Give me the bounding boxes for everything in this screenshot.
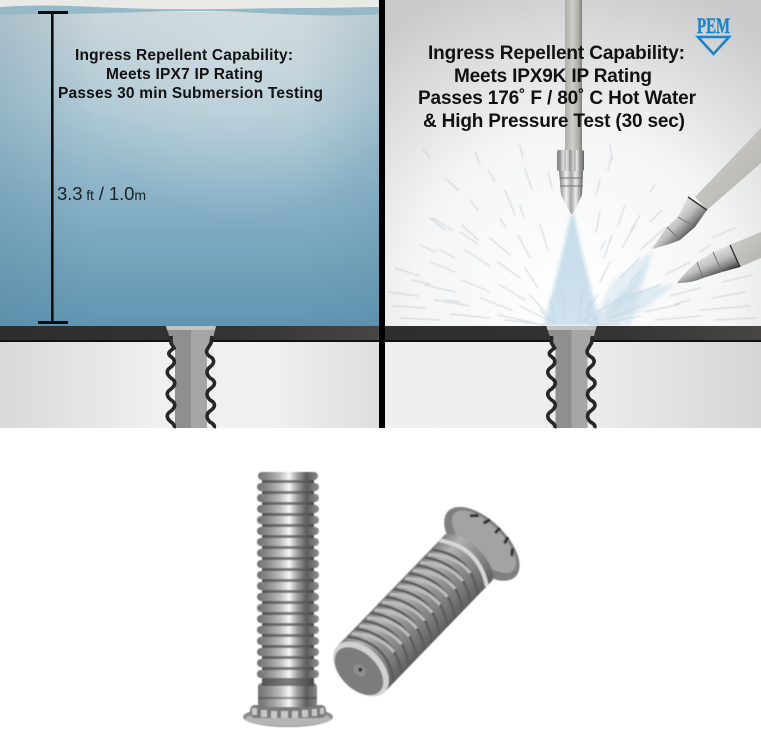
sheet plate — [385, 326, 761, 342]
text block: IPX7 rating: Passes 30 min Submersion Testing — [58, 85, 323, 102]
depth marker — [38, 11, 68, 324]
text block: IPX9K rating: Passes 176˚ F / 80˚ C Hot Water — [418, 88, 697, 109]
centre dimple — [351, 662, 368, 679]
text block: IPX7 rating — [58, 47, 323, 102]
photo: upright fastener — [243, 472, 333, 727]
threaded stud — [546, 326, 596, 428]
spray jets — [544, 214, 677, 326]
text block: IPX9K rating: Ingress Repellent Capability: — [428, 43, 685, 64]
depth label: 3.3 ft / 1.0m — [57, 183, 146, 204]
lower material — [385, 342, 761, 428]
panel: IPX9K hot water — [385, 0, 761, 428]
text block: IPX9K rating: & High Pressure Test (30 sec) — [423, 111, 685, 132]
flange — [243, 707, 333, 727]
shank — [337, 525, 501, 692]
threads — [257, 472, 319, 678]
panel: IPX7 submersion — [0, 0, 379, 428]
text block: IPX7 rating: Meets IPX7 IP Rating — [106, 66, 263, 83]
nozzle: lower angled — [677, 232, 761, 283]
water surface — [0, 5, 379, 15]
air above water — [0, 0, 379, 14]
text block: IPX9K rating: Meets IPX9K IP Rating — [454, 66, 652, 87]
water streaks — [388, 145, 755, 325]
shoulder highlight — [439, 532, 495, 586]
collar — [258, 683, 317, 707]
threaded stud — [166, 326, 216, 428]
thread core — [262, 474, 314, 686]
end cap — [323, 631, 399, 707]
flange — [431, 494, 532, 594]
nozzle: vertical — [557, 0, 584, 214]
water body — [0, 12, 379, 326]
photo: angled fastener — [313, 494, 532, 717]
knurl teeth — [252, 708, 324, 718]
logo: PEM — [697, 13, 730, 54]
threads — [348, 541, 486, 681]
panel divider — [379, 0, 385, 428]
nozzle: upper angled — [653, 128, 761, 249]
text block: IPX7 rating: Ingress Repellent Capability: — [75, 47, 293, 64]
logo: PEM: PEM — [697, 13, 730, 38]
spray background — [385, 0, 761, 326]
text block: IPX9K rating — [418, 43, 697, 132]
sheet plate — [0, 326, 379, 342]
lower material — [0, 342, 379, 428]
